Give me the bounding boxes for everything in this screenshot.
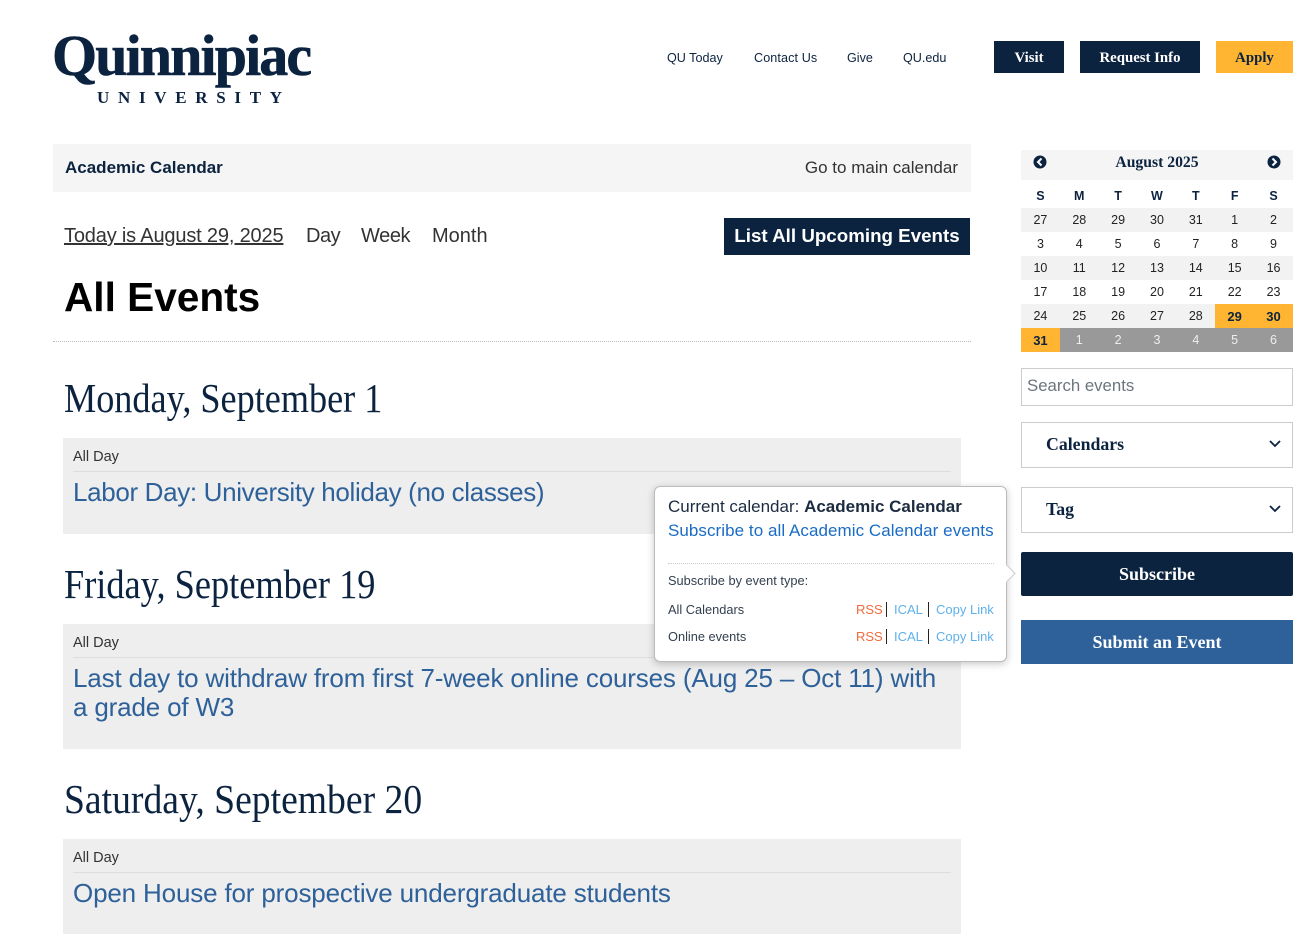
mini calendar grid: 4: [1192, 333, 1199, 347]
button: submit an event: Submit an Event: [1092, 632, 1222, 652]
mini calendar grid: 7: [1192, 237, 1199, 251]
date heading: Saturday: Saturday, September 20: [64, 776, 422, 822]
mini calendar grid: 31: [1033, 332, 1048, 348]
mini calendar grid: W: [1151, 189, 1163, 203]
top navigation: [667, 41, 1293, 73]
mini calendar grid: 20: [1150, 285, 1164, 299]
mini calendar grid: T: [1114, 189, 1122, 203]
mini calendar grid: 21: [1189, 285, 1203, 299]
button: request info: [1080, 41, 1200, 73]
search placeholder: Search events: [1027, 376, 1134, 395]
dotted divider: [53, 341, 971, 342]
event title: Last day to withdraw from first 7-week online courses (Aug 25 – Oct 11) with: [73, 663, 936, 693]
mini calendar grid: 30: [1150, 213, 1164, 227]
search box: [1021, 368, 1293, 406]
row links: Copy Link: [936, 629, 994, 644]
row links: ICAL: [894, 629, 923, 644]
dropdown: tag: Tag: [1046, 499, 1074, 519]
popover arrow: [997, 564, 1016, 583]
day view: Day: [306, 225, 340, 247]
dropdown: calendars: [1021, 422, 1293, 468]
icon: next month: [1268, 156, 1280, 168]
row links: [856, 629, 994, 644]
mini calendar grid: 23: [1267, 285, 1280, 299]
row links: [856, 602, 994, 617]
page heading: All Events: [64, 274, 260, 320]
mini calendar grid: 13: [1150, 261, 1164, 275]
mini calendar grid: 26: [1111, 309, 1125, 323]
mini calendar grid: 11: [1073, 261, 1086, 275]
row links: RSS: [856, 602, 883, 617]
mini calendar grid: 10: [1033, 261, 1047, 275]
event card: withdraw: [63, 624, 961, 749]
mini calendar grid: 12: [1111, 261, 1125, 275]
calendar title bar: [53, 144, 971, 192]
mini calendar grid: T: [1192, 189, 1200, 203]
mini calendar grid: 27: [1150, 309, 1164, 323]
mini calendar grid: M: [1074, 189, 1084, 203]
button: subscribe: [1021, 552, 1293, 596]
event card: open house: [63, 839, 961, 934]
mini calendar grid: 2: [1270, 213, 1277, 227]
mini calendar grid: 6: [1270, 333, 1277, 347]
mini calendar grid: 9: [1270, 237, 1277, 251]
event time: All Day: [73, 850, 119, 866]
mini calendar grid: S: [1269, 189, 1278, 203]
logo wordmark: Quinnipiac: [52, 23, 310, 88]
mini calendar grid: 29: [1111, 213, 1125, 227]
mini calendar grid: 4: [1076, 237, 1083, 251]
bar title: Academic Calendar: [65, 158, 223, 177]
mini calendar grid: 15: [1228, 261, 1242, 275]
dropdown: tag: [1021, 487, 1293, 533]
subscribe all link: Subscribe to all Academic Calendar events: [668, 521, 994, 540]
mini calendar grid: 19: [1111, 285, 1125, 299]
month view: Month: [432, 225, 488, 247]
nav link: QU.edu: [903, 51, 946, 65]
mini calendar grid: 1: [1076, 333, 1083, 347]
mini calendar grid: 3: [1153, 333, 1160, 347]
icon: previous month: [1034, 156, 1046, 168]
mini calendar grid: 27: [1033, 213, 1047, 227]
mini calendar grid: 29: [1227, 308, 1242, 324]
event title: Labor Day: University holiday (no classes): [73, 477, 544, 507]
button: list upcoming events: [724, 218, 970, 255]
mini calendar grid: S: [1036, 189, 1045, 203]
nav link: Give: [847, 51, 873, 65]
row links: Copy Link: [936, 602, 994, 617]
button: request info: Request Info: [1100, 50, 1180, 66]
mini calendar grid: 14: [1189, 261, 1203, 275]
event title: [73, 663, 936, 722]
button: list upcoming events: List All Upcoming Events: [734, 225, 960, 246]
mini calendar grid: 5: [1231, 333, 1238, 347]
mini calendar grid: 5: [1115, 237, 1122, 251]
main calendar link: Go to main calendar: [805, 158, 958, 177]
date heading: Friday: Friday, September 19: [64, 561, 375, 607]
subscribe popover: [654, 486, 1007, 662]
current calendar text: Current calendar: Academic Calendar: [668, 497, 962, 516]
mini calendar grid: 28: [1189, 309, 1203, 323]
mini calendar grid: 8: [1231, 237, 1238, 251]
button: visit: [994, 41, 1064, 73]
event time: All Day: [73, 449, 119, 465]
mini calendar grid: [1021, 189, 1293, 352]
row label: Online events: [668, 629, 746, 644]
mini calendar grid: 16: [1267, 261, 1280, 275]
mini calendar grid: F: [1231, 189, 1238, 203]
mini calendar header: [1021, 150, 1293, 180]
mini calendar grid: 2: [1115, 333, 1122, 347]
mini calendar grid: 17: [1033, 285, 1047, 299]
mini calendar grid: 3: [1037, 237, 1044, 251]
week view: Week: [361, 225, 410, 247]
dropdown: calendars: Calendars: [1046, 434, 1124, 454]
nav link: Contact Us: [754, 51, 817, 65]
button: visit: Visit: [1014, 50, 1044, 66]
mini calendar grid: 25: [1072, 309, 1086, 323]
nav link: QU Today: [667, 51, 723, 65]
button: apply: [1216, 41, 1293, 73]
mini calendar grid: 22: [1228, 285, 1242, 299]
event time: All Day: [73, 635, 119, 651]
mini calendar grid: 24: [1033, 309, 1047, 323]
mini calendar grid: 30: [1266, 308, 1281, 324]
mini calendar grid: 1: [1231, 213, 1238, 227]
mini calendar grid: 31: [1189, 213, 1203, 227]
button: subscribe: Subscribe: [1119, 564, 1195, 584]
mini calendar grid: 28: [1072, 213, 1086, 227]
logo subtitle: UNIVERSITY: [97, 88, 291, 107]
subscribe by event type: Subscribe by event type:: [668, 573, 808, 588]
event title: Open House for prospective undergraduate students: [73, 878, 671, 908]
date heading: Monday: Monday, September 1: [64, 375, 382, 421]
today link: Today is August 29, 2025: [64, 225, 283, 247]
logo: [52, 23, 311, 107]
mini calendar grid: 6: [1153, 237, 1160, 251]
view switcher: [64, 225, 488, 247]
event card: Labor Day: [63, 438, 961, 534]
event title: a grade of W3: [73, 692, 234, 722]
row links: ICAL: [894, 602, 923, 617]
row label: All Calendars: [668, 602, 744, 617]
mini calendar grid: 18: [1072, 285, 1086, 299]
row links: RSS: [856, 629, 883, 644]
button: submit an event: [1021, 620, 1293, 664]
month label: August 2025: [1115, 154, 1199, 171]
button: apply: Apply: [1235, 50, 1274, 66]
